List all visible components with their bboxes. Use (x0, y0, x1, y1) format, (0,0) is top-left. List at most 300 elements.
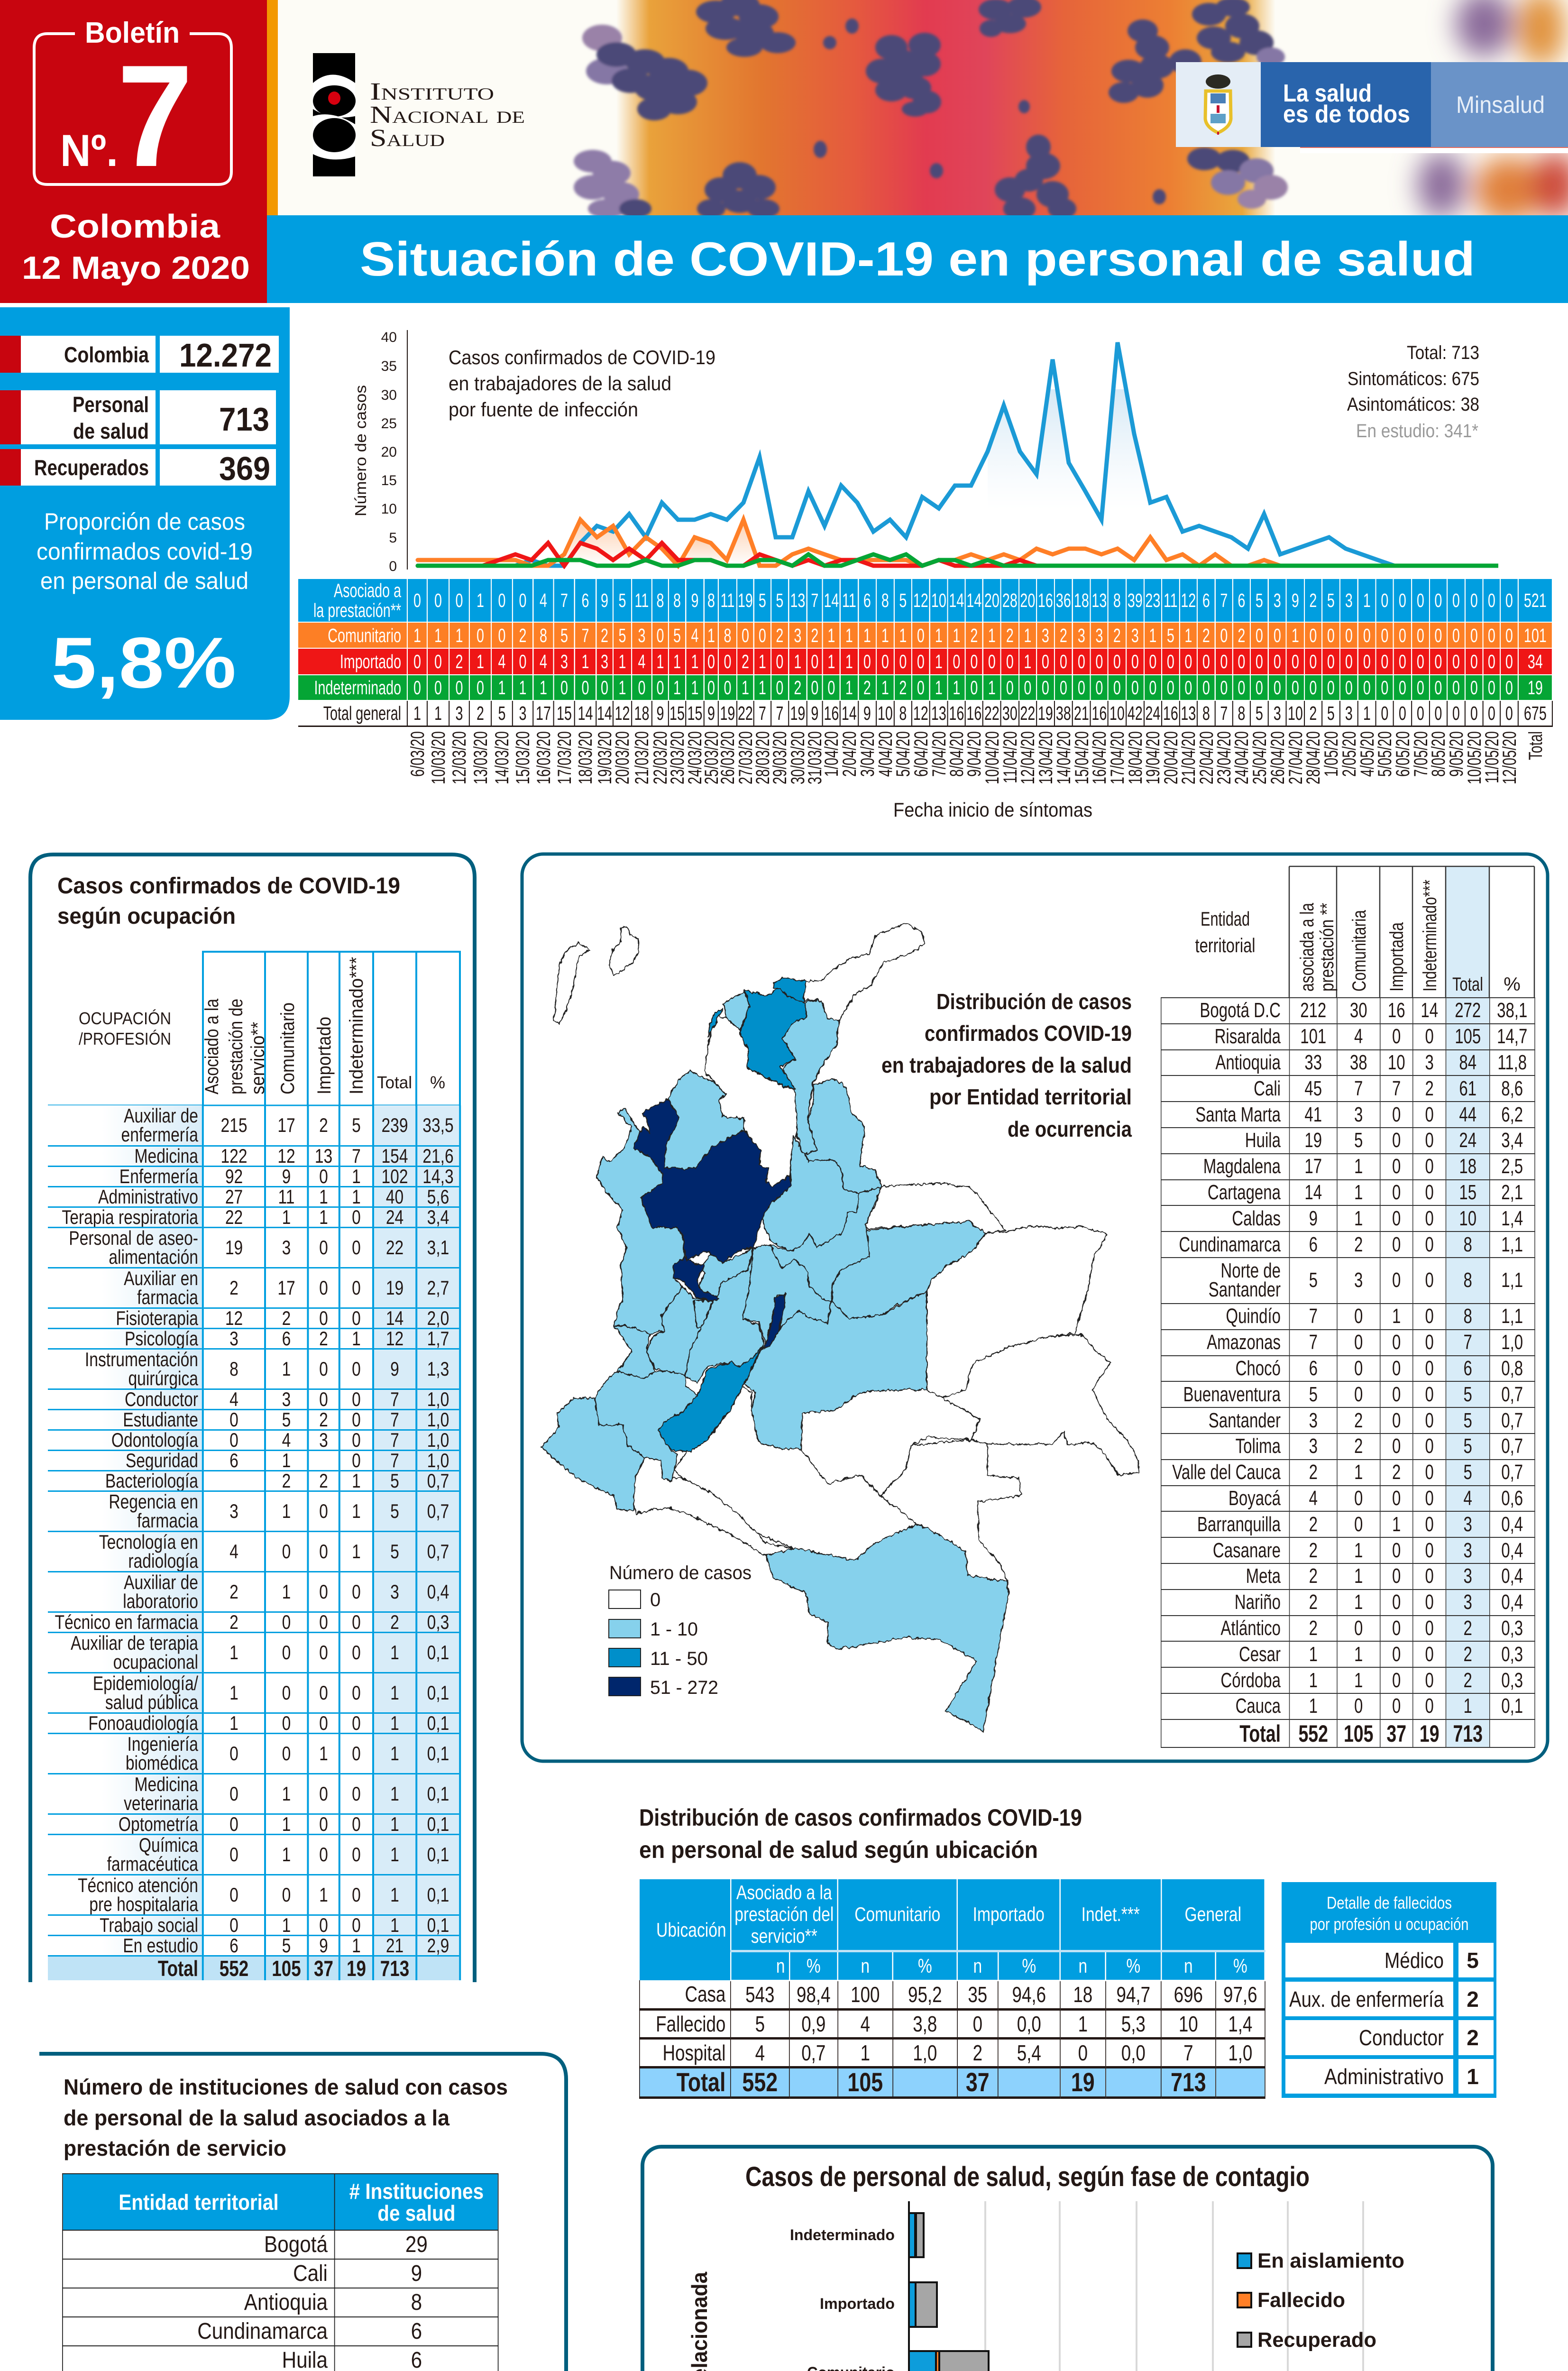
table: territorial entities: 5 (1464, 1461, 1472, 1484)
date axis labels: 8/05/20 (1428, 731, 1449, 777)
table: location: % (1233, 1955, 1247, 1976)
table: occupation rows: 1 (229, 1682, 238, 1703)
table: daily cases by source: 0 (1327, 677, 1335, 698)
table: location: 543 (745, 1982, 775, 2007)
table: daily cases by source: 0 (1202, 677, 1210, 698)
table: daily cases by source: 4 (540, 589, 547, 611)
date axis labels: 31/03/20 (804, 731, 825, 784)
table: location: 105 (847, 2067, 883, 2097)
table: location: 1,4 (1228, 2012, 1252, 2036)
table: daily cases by source: 1 (434, 624, 442, 646)
table: daily cases by source: 1 (759, 677, 766, 698)
table: daily cases by source: 0 (656, 624, 664, 646)
table: daily cases by source: 0 (970, 651, 978, 672)
table: territorial entities: 84 (1459, 1051, 1476, 1074)
table: territorial entities: 0 (1425, 1487, 1434, 1510)
table: territorial entities: 0 (1354, 1617, 1363, 1640)
title band (267, 215, 1568, 303)
table: daily cases by source: 0 (1113, 651, 1121, 672)
table header: Importado (314, 1017, 335, 1094)
table: territorial entities: 1,1 (1501, 1305, 1523, 1328)
connector frame line (39, 2052, 1490, 2371)
table: territorial entities: 6 (1309, 1233, 1318, 1256)
date axis labels: 15/03/20 (512, 731, 533, 784)
table: daily cases by source: 13 (931, 702, 946, 724)
table: occupation rows: 17 (277, 1277, 295, 1298)
table: location: 0,7 (801, 2040, 825, 2065)
table: territorial entities: Boyacá (1229, 1487, 1281, 1510)
table: territorial entities: 19 (1420, 1720, 1440, 1747)
table: daily cases by source: 0 (413, 677, 421, 698)
table: daily cases by source: 0 (1042, 677, 1049, 698)
table: daily cases by source: 0 (1220, 651, 1228, 672)
table: daily cases by source: 0 (1006, 677, 1014, 698)
table: daily cases by source: 5 (1327, 589, 1335, 611)
table: location: n (973, 1955, 982, 1976)
table: daily cases by source: 16 (1091, 702, 1107, 724)
logo wordmark (370, 78, 525, 152)
table: daily cases by source: 0 (455, 589, 463, 611)
table: occupation rows: 0,1 (427, 1843, 449, 1866)
table: daily cases by source: 0 (1488, 702, 1495, 724)
table: territorial entities: 0,8 (1501, 1357, 1523, 1380)
table: occupation rows: veterinaria (124, 1792, 198, 1814)
table: daily cases by source: 0 (1399, 702, 1406, 724)
table: territorial entities: 37 (1386, 1720, 1406, 1747)
table: territorial entities: 0 (1425, 1643, 1434, 1666)
date axis labels: 1/05/20 (1320, 731, 1342, 777)
table: daily cases by source: 2 (1006, 624, 1014, 646)
table: occupation rows: farmacéutica (107, 1852, 198, 1875)
date axis labels: 27/04/20 (1285, 731, 1306, 784)
table: daily cases by source: 1 (1024, 624, 1031, 646)
table: occupation rows: 1 (282, 1843, 291, 1866)
table: territorial entities: 24 (1459, 1129, 1476, 1152)
table: daily cases by source: 0 (1167, 651, 1174, 672)
table: daily cases by source: 1 (794, 651, 801, 672)
table: location: servicio** (751, 1925, 817, 1947)
table: daily cases by source: 1 (434, 702, 442, 724)
table: daily cases by source: 0 (1470, 702, 1478, 724)
table: daily cases by source: 0 (776, 651, 783, 672)
table: territorial entities: 0 (1392, 1357, 1401, 1380)
territorial table header: prestación ** (1317, 903, 1338, 992)
table: territorial entities: Cesar (1239, 1643, 1281, 1666)
map legend: 1 - 10 (650, 1619, 698, 1640)
date axis labels: 25/04/20 (1249, 731, 1270, 784)
table: daily cases by source: 0 (1488, 589, 1495, 611)
table: occupation rows: 0 (282, 1641, 291, 1663)
table: occupation rows: 9 (390, 1357, 399, 1380)
table: territorial entities: 0 (1354, 1305, 1363, 1328)
table: daily cases by source: 4 (498, 651, 505, 672)
table: daily cases by source: 0 (970, 677, 978, 698)
date axis labels: 22/03/20 (650, 731, 671, 784)
table: occupation rows: 17 (277, 1114, 295, 1136)
table: territorial entities: 0 (1354, 1513, 1363, 1536)
stat: Personal de salud (0, 390, 276, 444)
table: daily cases by source: 1 (881, 624, 889, 646)
table: daily cases by source: 1 (1024, 651, 1031, 672)
table: territorial entities: 1,0 (1501, 1331, 1523, 1354)
table: daily cases by source: 0 (1095, 677, 1103, 698)
table: daily cases by source: 0 (1417, 702, 1424, 724)
table: daily cases by source: 3 (1274, 589, 1281, 611)
table: location: Casa (685, 1982, 725, 2006)
table: territorial entities: 2 (1309, 1564, 1318, 1588)
table: location (639, 1879, 1265, 2099)
map legend: Número de casos (609, 1562, 752, 1583)
table: territorial entities: Bogotá D.C (1200, 999, 1281, 1022)
table: daily cases by source: la prestación** (313, 599, 401, 621)
table: daily cases by source: 0 (1399, 651, 1406, 672)
table: territorial entities: Atlántico (1220, 1617, 1281, 1640)
table: territorial entities: Amazonas (1207, 1331, 1281, 1354)
table: institutions: Bogotá (264, 2232, 328, 2257)
table: daily cases by source: 8 (899, 702, 907, 724)
table: daily cases by source: 3 (1345, 702, 1353, 724)
date axis labels: 21/03/20 (631, 731, 652, 784)
table: territorial entities: 0,7 (1501, 1434, 1523, 1458)
table: daily cases by source: 0 (1505, 624, 1513, 646)
table: daily cases by source: 0 (1078, 651, 1085, 672)
table: daily cases by source: 1 (845, 677, 853, 698)
table: daily cases by source: 0 (759, 624, 766, 646)
table: territorial entities: 8 (1464, 1305, 1472, 1328)
date axis labels: 13/03/20 (470, 731, 491, 784)
table rows: Administrativo (1324, 2064, 1444, 2089)
date axis labels: 24/04/20 (1231, 731, 1252, 784)
table: territorial entities: 3 (1464, 1539, 1472, 1562)
icon: coat of arms (1205, 74, 1231, 135)
table: occupation rows: 0,7 (427, 1540, 449, 1562)
table: territorial entities: 0,3 (1501, 1669, 1523, 1692)
table: territorial entities: 5 (1354, 1129, 1363, 1152)
table: territorial entities: Quindío (1226, 1305, 1281, 1328)
table: occupation rows: 0 (352, 1742, 361, 1764)
table: daily cases by source: 1 (1292, 624, 1299, 646)
totals note: En estudio: 341* (1356, 421, 1478, 441)
table: territorial entities: 0 (1425, 1590, 1434, 1614)
table: daily cases by source: 5 (560, 624, 568, 646)
table: territorial entities: 6,2 (1501, 1103, 1523, 1126)
table header: Asociado a la (202, 998, 222, 1094)
stat: Personal de salud: de salud (73, 419, 149, 443)
date axis labels: 23/04/20 (1213, 731, 1235, 784)
table: occupation rows: laboratorio (123, 1590, 198, 1612)
table: daily cases by source: 3 (1131, 624, 1139, 646)
table: territorial entities: 10 (1459, 1207, 1476, 1230)
table: daily cases by source: 8 (1238, 702, 1245, 724)
table: daily cases by source: 9 (863, 702, 871, 724)
date axis labels: 11/05/20 (1481, 731, 1503, 783)
table: daily cases by source: 1 (707, 624, 715, 646)
table: daily cases by source: 0 (1363, 677, 1371, 698)
table: daily cases by source: 1 (477, 589, 484, 611)
territorial table header: Entidad (1201, 908, 1250, 930)
y axis: 30 (381, 387, 397, 403)
table: daily cases by source: 16 (1163, 702, 1178, 724)
panel: cases by occupation (28, 853, 477, 1982)
table: location: 37 (966, 2067, 990, 2097)
y axis: 20 (381, 444, 397, 460)
table: territorial entities: 0 (1425, 1539, 1434, 1562)
table: daily cases by source: 0 (1042, 651, 1049, 672)
table: territorial entities: 1 (1309, 1643, 1318, 1666)
table: location: Indet.*** (1082, 1903, 1140, 1925)
table: daily cases by source: 9 (656, 702, 664, 724)
table: occupation rows: 0,1 (427, 1742, 449, 1764)
table: daily cases by source: 1 (935, 624, 943, 646)
table: location: 4 (861, 2012, 870, 2036)
territorial table header: Comunitaria (1349, 910, 1370, 992)
table: location: 0,9 (801, 2012, 825, 2036)
table: location: 95,2 (908, 1982, 942, 2007)
table: daily cases by source: 0 (519, 589, 526, 611)
date axis labels (408, 728, 1555, 820)
date axis labels: 16/04/20 (1089, 731, 1110, 784)
table: territorial entities: 1,1 (1501, 1268, 1523, 1292)
table: territorial entities: 0 (1354, 1694, 1363, 1718)
table: occupation rows: 552 (220, 1956, 248, 1980)
table: location: 1 (861, 2040, 870, 2065)
table: daily cases by source: 1 (618, 651, 626, 672)
table: daily cases by source: 0 (1256, 651, 1263, 672)
table: daily cases by source: 2 (1202, 624, 1210, 646)
y axis (381, 330, 408, 574)
table rows: Aux. de enfermería (1289, 1987, 1444, 2012)
date axis labels: 9/04/20 (963, 731, 985, 777)
table: territorial entities: 2 (1354, 1233, 1363, 1256)
table: daily cases by source: 0 (863, 651, 871, 672)
table: daily cases by source: 0 (1452, 677, 1460, 698)
table: occupation rows: 0 (319, 1357, 328, 1380)
table: occupation rows: 19 (347, 1956, 366, 1980)
table: occupation rows: 2,7 (427, 1277, 449, 1298)
table: territorial entities: 11,8 (1497, 1051, 1527, 1074)
table: daily cases by source: 1 (935, 651, 943, 672)
proportion label (37, 508, 253, 594)
table: daily cases by source: 4 (691, 624, 698, 646)
table: daily cases by source: 0 (1470, 677, 1478, 698)
heading: según ocupación (57, 904, 236, 929)
table: daily cases by source: 0 (1024, 677, 1031, 698)
table: occupation rows: 2 (229, 1580, 238, 1603)
table: daily cases by source: Total general (323, 702, 401, 724)
proportion label: confirmados covid-19 (37, 538, 253, 565)
table: daily cases by source: 12 (913, 702, 928, 724)
table: daily cases by source: 5 (673, 624, 681, 646)
table: daily cases by source: 0 (638, 677, 645, 698)
stat: Colombia: 12.272 (179, 337, 272, 374)
table: territorial entities: 0,4 (1501, 1539, 1523, 1562)
table: occupation rows: 0 (352, 1782, 361, 1805)
date axis labels: 20/03/20 (612, 731, 633, 784)
totals note: Sintomáticos: 675 (1348, 368, 1479, 389)
date axis labels: 10/05/20 (1464, 731, 1485, 784)
table: daily cases by source: 19 (790, 702, 805, 724)
table: occupation rows: 0 (319, 1277, 328, 1298)
table: daily cases by source: 0 (1309, 651, 1317, 672)
table: daily cases by source: 3 (1042, 624, 1049, 646)
territorial table header: % (1504, 974, 1521, 995)
table: territorial entities: Cundinamarca (1179, 1233, 1281, 1256)
table: occupation rows: ocupacional (113, 1650, 198, 1673)
table: daily cases by source: 0 (1113, 677, 1121, 698)
table: daily cases by source: 12 (1181, 589, 1196, 611)
table: daily cases by source: 11 (1164, 589, 1178, 611)
table: daily cases by source: 1 (953, 624, 960, 646)
map of Colombia (541, 924, 1139, 1732)
date axis labels: 3/04/20 (857, 731, 878, 777)
table: territorial entities: 41 (1304, 1103, 1322, 1126)
table: daily cases by source: 39 (1128, 589, 1143, 611)
table: daily cases by source: 0 (560, 677, 568, 698)
logo wordmark: Salud (370, 125, 445, 152)
table: daily cases by source: 22 (984, 702, 999, 724)
table: territorial entities: 0 (1392, 1434, 1401, 1458)
chart legend (1238, 2249, 1404, 2352)
date axis labels: 7/04/20 (928, 731, 950, 777)
table: territorial entities: 1 (1354, 1155, 1363, 1178)
table: daily cases by source: 5 (618, 589, 626, 611)
table: daily cases by source: 36 (1056, 589, 1071, 611)
date axis labels: 6/05/20 (1392, 731, 1413, 777)
y axis: 15 (381, 473, 397, 488)
table: daily cases by source: 5 (776, 589, 783, 611)
ministry name: Minsalud (1456, 92, 1545, 118)
table: occupation rows: 37 (314, 1956, 333, 1980)
table: daily cases by source: 0 (1345, 651, 1353, 672)
table: daily cases by source: 1 (845, 651, 853, 672)
table: daily cases by source: 2 (455, 651, 463, 672)
table: occupation rows: 3 (229, 1499, 238, 1522)
table: occupation rows: 3 (390, 1580, 399, 1603)
table: daily cases by source: 0 (1184, 677, 1192, 698)
line series (418, 342, 1508, 566)
date: 12 Mayo 2020 (22, 250, 250, 286)
table: daily cases by source: 0 (1417, 624, 1424, 646)
map legend: 11 - 50 (650, 1648, 708, 1669)
table rows: 2 (1467, 1987, 1479, 2012)
table: daily cases by source: 1 (881, 677, 889, 698)
panel: institutions by territory (62, 2054, 498, 2371)
table: location: Importado (973, 1903, 1045, 1925)
table: daily cases by source: 6 (1238, 589, 1245, 611)
date axis labels: 11/04/20 (999, 731, 1021, 783)
table: daily cases by source: 0 (1488, 624, 1495, 646)
table: daily cases by source: 11 (635, 589, 649, 611)
chart title: Casos de personal de salud, según fase de contagio (745, 2161, 1310, 2192)
table: territorial entities: 105 (1455, 1025, 1481, 1048)
table: territorial entities: Norte de (1220, 1259, 1281, 1282)
proportion label: Proporción de casos (44, 508, 245, 535)
table: daily cases by source: 1 (759, 651, 766, 672)
table: occupation rows: 22 (386, 1236, 403, 1259)
table: territorial entities: 0,6 (1501, 1487, 1523, 1510)
table: institutions: 29 (405, 2232, 428, 2257)
table: location: General (1185, 1903, 1241, 1925)
territorial table header: asociada a la (1297, 902, 1318, 992)
date axis labels: 30/03/20 (787, 731, 808, 784)
table: territorial entities: 101 (1300, 1025, 1326, 1048)
table: daily cases by source: 19 (738, 589, 753, 611)
table: territorial entities (1161, 997, 1535, 1748)
totals note (1347, 342, 1479, 441)
table: territorial entities: 0 (1425, 1233, 1434, 1256)
table: occupation rows: farmacia (137, 1286, 198, 1308)
table: daily cases by source: 7 (1220, 589, 1228, 611)
table: territorial entities: 1 (1354, 1590, 1363, 1614)
table: daily cases by source: 20 (984, 589, 999, 611)
table: daily cases by source: 0 (434, 677, 442, 698)
table: institutions: 6 (411, 2319, 422, 2343)
title: Situación de COVID-19 en personal de salud (360, 233, 1475, 286)
table: occupation rows: 19 (225, 1236, 243, 1259)
table: daily cases by source: 0 (1505, 651, 1513, 672)
section: cases by location (639, 1807, 1265, 2098)
table: territorial entities: 0 (1425, 1155, 1434, 1178)
table: territorial entities: 4 (1464, 1487, 1472, 1510)
table: occupation rows: 5 (390, 1499, 399, 1522)
series: asociado (418, 342, 1508, 566)
table: occupation rows: pre hospitalaria (89, 1893, 198, 1915)
table: occupation rows: 1 (352, 1540, 361, 1562)
table: territorial entities: Barranquilla (1197, 1513, 1281, 1536)
table: occupation rows: 0 (282, 1682, 291, 1703)
table: daily cases by source: 10 (878, 702, 893, 724)
territorial table header: Indeterminado*** (1420, 880, 1440, 992)
table: territorial entities: 0,7 (1501, 1461, 1523, 1484)
table: location: 94,7 (1116, 1982, 1150, 2007)
y axis: 35 (381, 358, 397, 374)
table: daily cases by source: 0 (1452, 624, 1460, 646)
heading: de personal de la salud asociados a la (64, 2105, 449, 2130)
stat: Colombia (0, 336, 279, 374)
table: daily cases by source: 0 (1238, 651, 1245, 672)
table: territorial entities: 2 (1392, 1461, 1401, 1484)
date axis labels: 5/05/20 (1374, 731, 1395, 777)
table: daily cases by source: 7 (776, 702, 783, 724)
series: importado (415, 540, 1036, 569)
table: territorial entities: 7 (1309, 1305, 1318, 1328)
y axis: 10 (381, 501, 397, 517)
table: territorial entities: 16 (1388, 999, 1405, 1022)
table: daily cases by source: 0 (498, 624, 505, 646)
chart heading: en trabajadores de la salud (449, 372, 671, 395)
table: daily cases by source: 0 (1381, 677, 1388, 698)
table: territorial entities: 0,3 (1501, 1643, 1523, 1666)
table: daily cases by source: 0 (1381, 589, 1388, 611)
table: daily cases by source: 2 (863, 677, 871, 698)
table: location: 3,8 (913, 2012, 937, 2036)
table: daily cases by source: 0 (1470, 589, 1478, 611)
map title: Distribución de casos (936, 989, 1132, 1014)
table: daily cases by source: 0 (1345, 624, 1353, 646)
table: territorial entities: 0 (1392, 1643, 1401, 1666)
table: daily cases by source: 0 (1327, 651, 1335, 672)
table: daily cases by source: 22 (738, 702, 753, 724)
table: territorial entities: 0 (1425, 1305, 1434, 1328)
date axis labels: 8/04/20 (946, 731, 967, 777)
table: daily cases by source: 1 (691, 651, 698, 672)
table: territorial entities: 0 (1392, 1103, 1401, 1126)
date axis labels: 22/04/20 (1196, 731, 1217, 784)
table: daily cases by source: 0 (1292, 651, 1299, 672)
table: institutions: Cundinamarca (197, 2319, 328, 2343)
proportion value: 5,8% (51, 623, 236, 703)
table: daily cases by source: 1 (618, 677, 626, 698)
